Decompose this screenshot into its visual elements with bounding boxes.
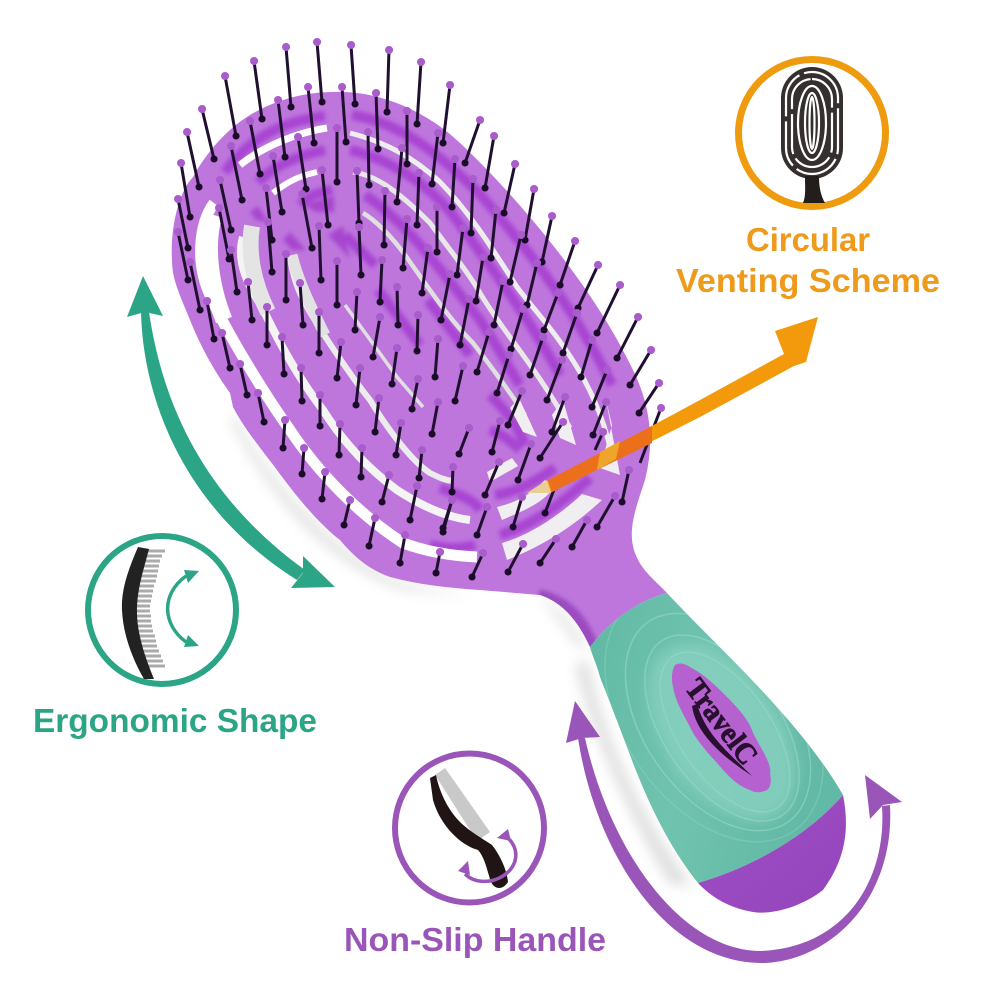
icon: brush top view [781, 67, 843, 203]
orange arrow body [527, 317, 818, 493]
neck shading [538, 597, 592, 650]
icon: curved brush side [122, 547, 165, 679]
logo oval [672, 664, 771, 792]
pale arrow tip [527, 480, 551, 493]
dark recesses [250, 196, 350, 258]
green arrow bottom head [291, 556, 335, 588]
vent slots [201, 128, 615, 557]
dark grooves on rings [225, 115, 612, 548]
arrow: purple curved double arrow [566, 701, 902, 963]
green circle [88, 536, 236, 684]
orange arrow over slot [597, 441, 620, 470]
purple circle [395, 754, 544, 902]
bristle bases [188, 102, 639, 577]
logo text: TravelC [678, 672, 764, 771]
feature: non-slip handle [344, 754, 606, 958]
grip ribs [604, 612, 824, 842]
orange circle [738, 60, 886, 206]
soft shadow under brush [230, 415, 692, 885]
logo swash [692, 704, 752, 776]
icon: green curved arrow [168, 570, 199, 647]
arrow: orange venting [527, 317, 818, 493]
bristle stems [178, 42, 661, 577]
brush [172, 92, 667, 650]
bristles [178, 42, 661, 577]
label: ergonomic shape: Ergonomic Shape [33, 702, 317, 739]
orange arrow over brush [548, 426, 652, 492]
slot wedges [487, 398, 620, 560]
label: non-slip handle: Non-Slip Handle [344, 921, 606, 958]
icon: purple rotation arrow [458, 829, 516, 881]
feature: ergonomic shape [33, 536, 317, 739]
arrow: green curved double arrow [127, 276, 335, 588]
hatched bristles [135, 551, 165, 666]
purple arrow right head [865, 775, 902, 819]
label: circular venting scheme: Circular [746, 221, 870, 258]
icon: tilted brush [430, 768, 508, 888]
feature: circular venting scheme [676, 60, 940, 299]
green arrow top head [127, 276, 163, 317]
purple end cap [698, 795, 846, 913]
purple arrow shaft [578, 738, 890, 963]
bristle ball tips [178, 42, 661, 553]
label: circular venting scheme: Venting Scheme [676, 262, 940, 299]
brush head [172, 92, 667, 647]
teal grip [590, 593, 843, 883]
green arrow shaft [141, 312, 305, 580]
handle [590, 593, 846, 913]
purple arrow left head [566, 701, 600, 743]
